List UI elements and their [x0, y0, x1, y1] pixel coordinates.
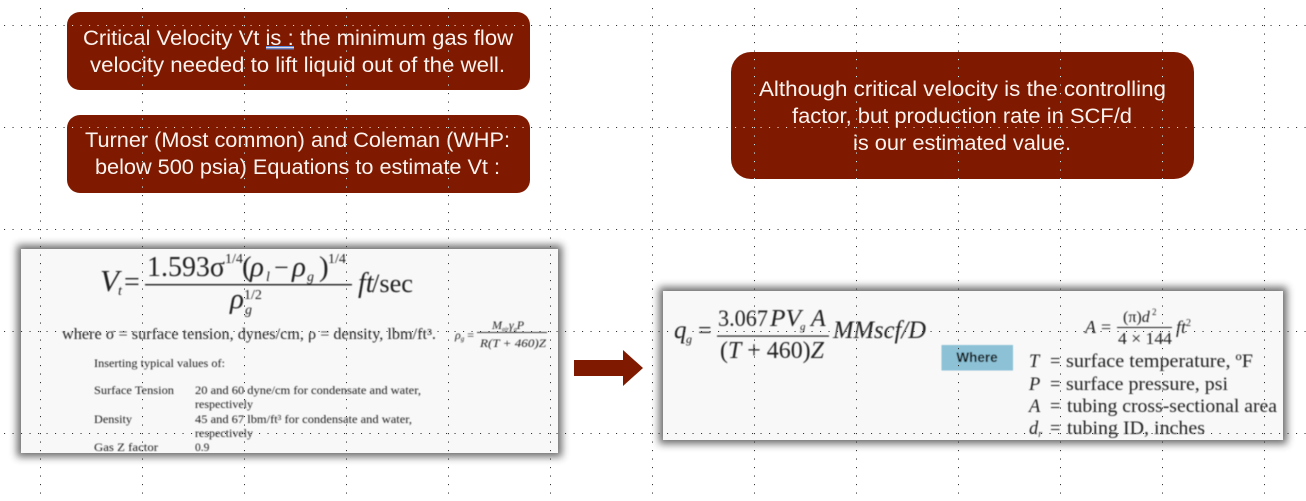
table: typical values: Inserting typical values of:	[94, 358, 225, 370]
equation: gas rate qg: MMscf/D	[832, 317, 926, 344]
list: variable definitions: d	[1029, 419, 1038, 439]
equation: critical velocity Vt: 1/4	[225, 252, 243, 267]
equation: critical velocity Vt: ρ	[291, 251, 306, 283]
equation: gas rate qg: g	[800, 321, 806, 333]
list: variable definitions: =	[1050, 397, 1060, 417]
panel: critical velocity equation	[17, 245, 562, 457]
equation: gas rate qg: (T + 460)Z	[720, 338, 825, 364]
equation: gas density: M	[492, 318, 502, 332]
text: where definitions: where σ = surface tension, dynes/cm, ρ = density, lbm/ft³.	[62, 326, 436, 343]
callout: production rate note: Although critical velocity is the controlling	[759, 78, 1166, 101]
equation: critical velocity Vt: l	[266, 270, 270, 285]
table: typical values: respectively	[195, 428, 253, 440]
equation: critical velocity Vt: g	[307, 270, 314, 285]
equation: tubing area	[1084, 307, 1191, 348]
equation: critical velocity Vt: −	[274, 253, 289, 282]
equation: gas density	[454, 318, 547, 350]
equation: critical velocity Vt: ft	[358, 268, 375, 299]
equation: gas rate qg	[674, 306, 926, 364]
callout: critical velocity definition: Critical Velocity Vt is : the minimum gas flow	[83, 27, 514, 50]
callout: Turner and Coleman equations	[67, 115, 530, 193]
equation: gas density: R(T + 460)Z	[479, 336, 546, 350]
equation: critical velocity Vt: 1/4	[328, 252, 346, 267]
arrow	[574, 350, 643, 386]
equation: gas density: γ	[509, 318, 514, 332]
equation: critical velocity Vt: =	[124, 267, 140, 298]
callout: Turner and Coleman equations: below 500 psia) Equations to estimate Vt :	[95, 156, 500, 179]
equation: tubing area: (π)d	[1123, 309, 1151, 326]
callout: production rate note: is our estimated value.	[853, 132, 1071, 155]
equation: gas density: g	[514, 327, 517, 333]
equation: gas rate qg: g	[686, 332, 692, 346]
label: where	[942, 345, 1013, 370]
callout: critical velocity definition	[67, 12, 530, 90]
label: where: Where	[956, 350, 998, 365]
equation: critical velocity Vt: ρ	[249, 251, 264, 283]
equation: critical velocity Vt	[100, 251, 413, 318]
list: variable definitions	[1027, 352, 1277, 440]
equation: critical velocity Vt: (	[242, 251, 252, 283]
table: typical values: Gas Z factor	[94, 442, 158, 454]
equation: critical velocity Vt: )	[319, 251, 329, 283]
equation: tubing area: =	[1101, 317, 1111, 337]
equation: critical velocity Vt: 1/2	[244, 288, 262, 303]
callout: production rate note	[731, 52, 1194, 179]
list: variable definitions: surface temperature, ºF	[1066, 352, 1253, 372]
equation: gas density: air	[502, 327, 510, 333]
table: typical values: 45 and 67 lbm/ft³ for condensate and water,	[195, 414, 412, 426]
equation: gas rate qg: A	[809, 306, 826, 332]
callout: Turner and Coleman equations: Turner (Most common) and Coleman (WHP:	[85, 129, 510, 152]
list: variable definitions: =	[1050, 352, 1060, 372]
equation: gas rate qg: 3.067	[718, 306, 768, 331]
table: typical values: 20 and 60 dyne/cm for condensate and water,	[195, 385, 421, 397]
equation: critical velocity Vt: /sec	[372, 269, 413, 298]
list: variable definitions: P	[1028, 375, 1040, 395]
equation: tubing area: 4 × 144	[1118, 329, 1173, 348]
table: typical values: respectively	[195, 399, 253, 411]
callout: production rate note: factor, but production rate in SCF/d	[792, 105, 1132, 128]
equation: tubing area: 2	[1152, 307, 1156, 317]
equation: critical velocity Vt: 1.593σ	[147, 251, 225, 283]
equation: critical velocity Vt: ρ	[229, 283, 244, 315]
callout: critical velocity definition: velocity needed to lift liquid out of the well.	[90, 54, 505, 77]
table: typical values: 0.9	[195, 442, 210, 454]
list: variable definitions: r	[1038, 429, 1042, 440]
table: typical values: Density	[94, 414, 132, 426]
table: typical values	[94, 358, 421, 454]
equation: critical velocity Vt: g	[245, 303, 252, 318]
equation: critical velocity Vt: V	[100, 263, 122, 298]
equation: gas density: P	[516, 318, 525, 332]
list: variable definitions: tubing cross-sectional area	[1067, 397, 1277, 417]
equation: tubing area: A	[1084, 317, 1097, 337]
equation: gas rate qg: PV	[769, 306, 803, 332]
equation: gas rate qg: =	[698, 318, 712, 344]
equation: gas rate qg: q	[674, 317, 686, 344]
list: variable definitions: A	[1027, 397, 1041, 417]
list: variable definitions: =	[1050, 375, 1060, 395]
equation: gas density: =	[464, 328, 474, 342]
equation: gas density: g	[461, 335, 465, 343]
equation: tubing area: 2	[1186, 318, 1191, 329]
list: variable definitions: =	[1050, 419, 1060, 439]
panel: production rate equation	[659, 287, 1287, 444]
list: variable definitions: surface pressure, psi	[1066, 375, 1228, 395]
list: variable definitions: tubing ID, inches	[1067, 419, 1205, 439]
equation: tubing area: ft	[1176, 317, 1186, 337]
table: typical values: Surface Tension	[94, 385, 174, 397]
equation: gas density: ρ	[455, 328, 461, 342]
equation: critical velocity Vt: t	[118, 284, 123, 299]
list: variable definitions: T	[1029, 352, 1041, 372]
